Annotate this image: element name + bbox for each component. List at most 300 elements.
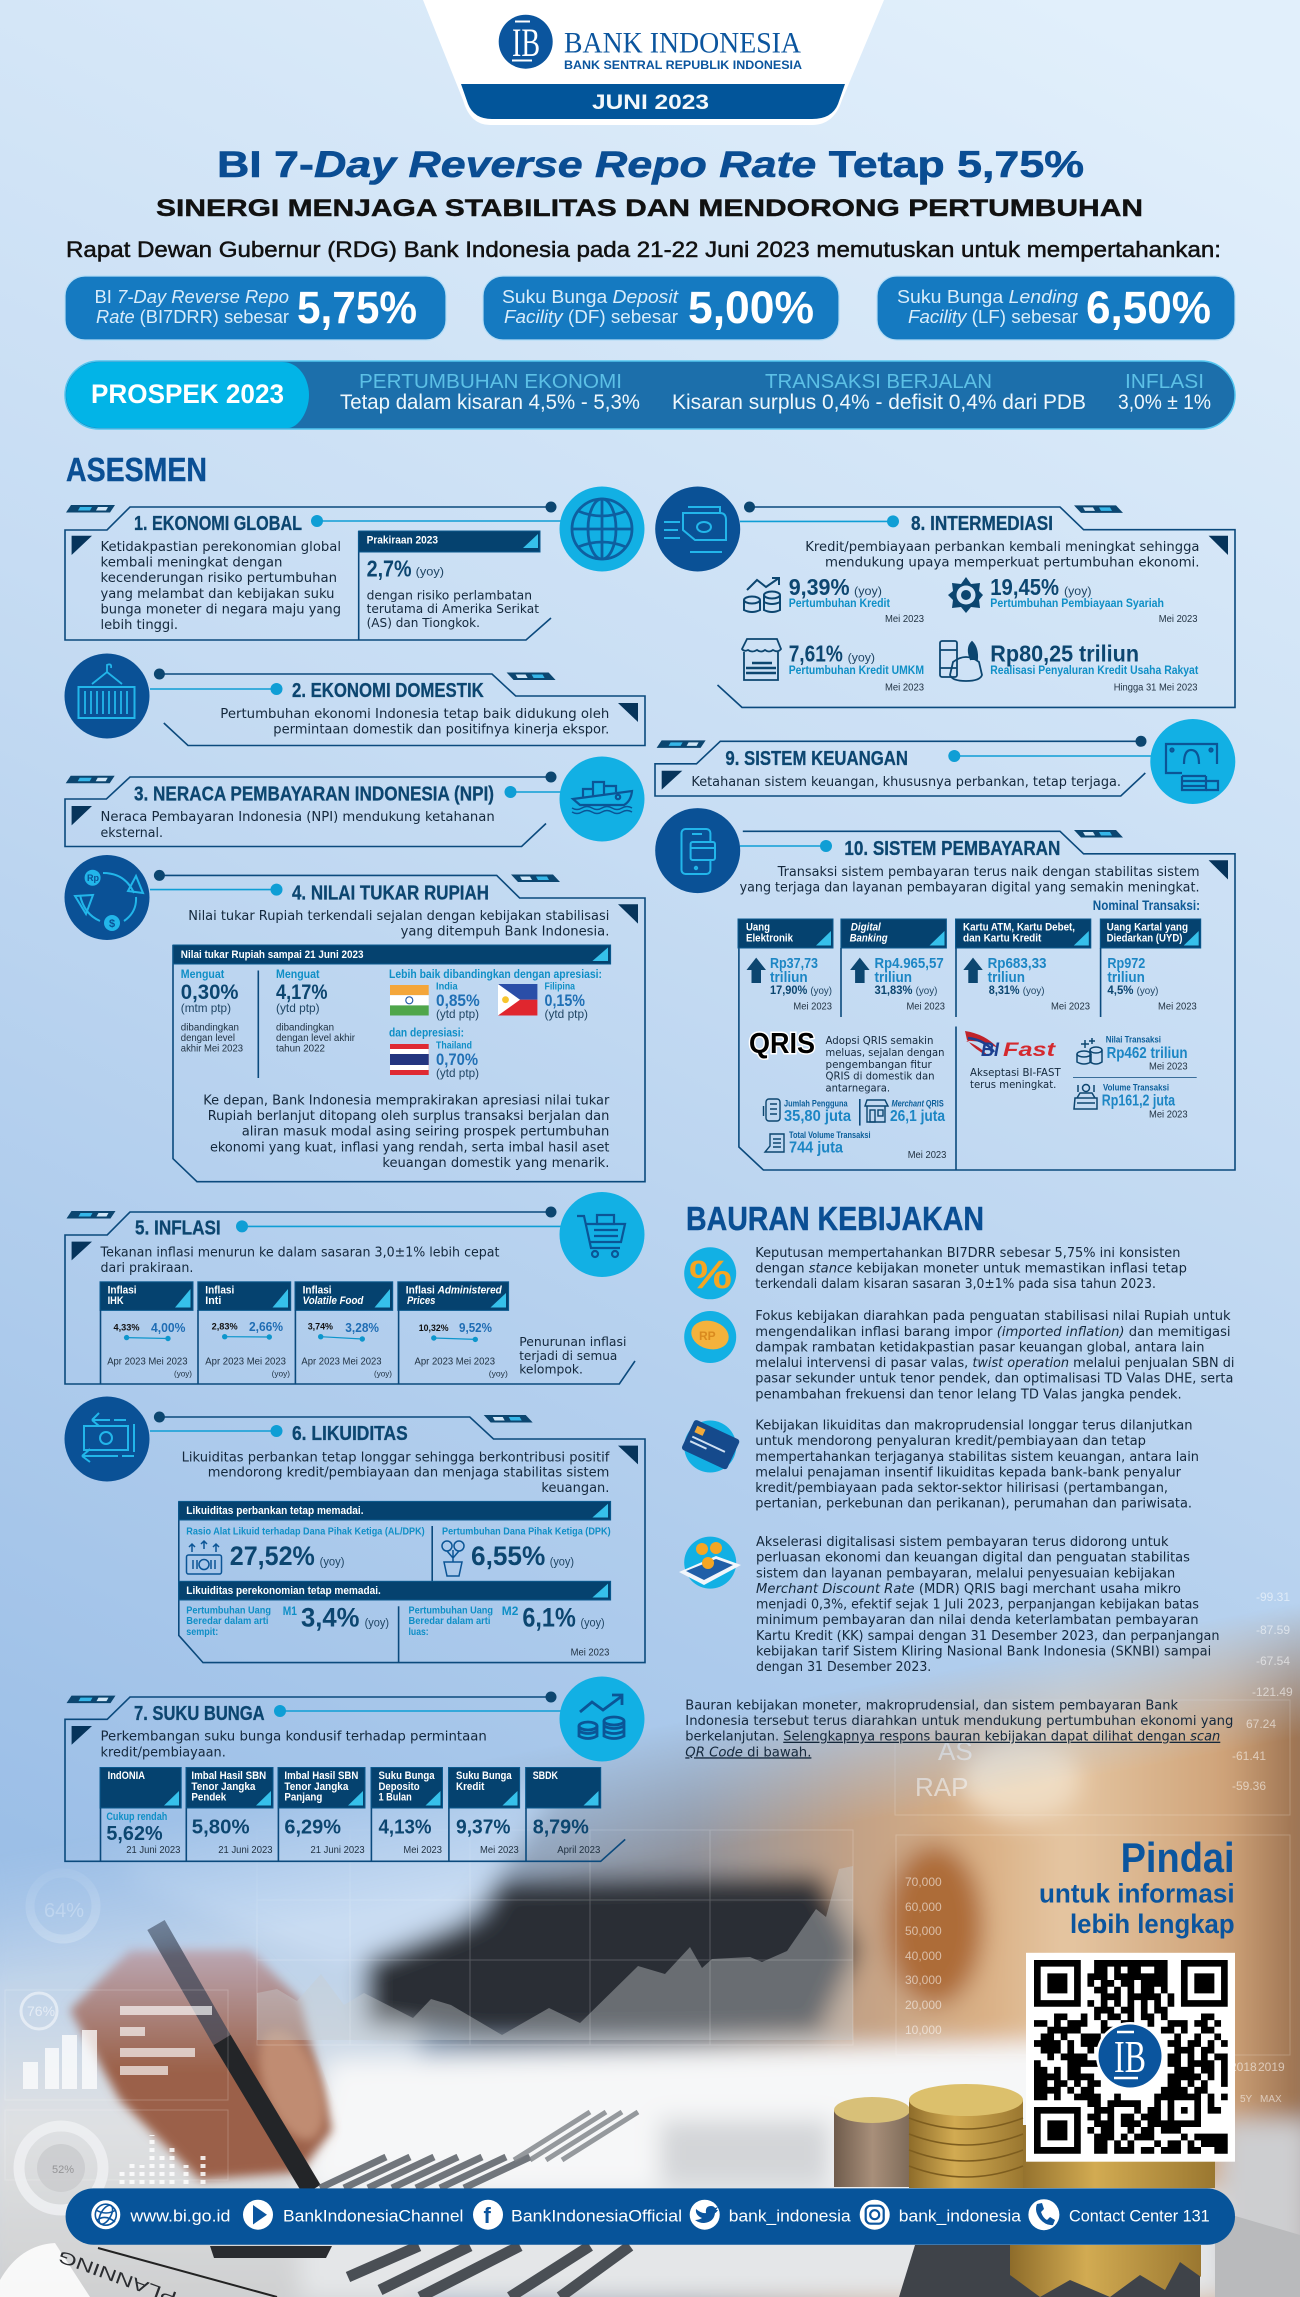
stat: M1: sempit: [186,1626,218,1638]
icon: currency cycle: Rp [87,873,99,883]
rate card: kredit: Kredit [456,1781,485,1793]
card: UYD: 4,5% [1107,983,1134,997]
QRIS text: pengembangan fitur [826,1059,932,1071]
main title: BI 7- Day Reverse Repo Rate Tetap 5,75% [217,144,1084,185]
closing text: QR Code di bawah. [685,1745,811,1760]
card: UYD: triliun [1107,969,1145,986]
stat: menguat ytd: dibandingkan [276,1023,334,1034]
background photo: hand, charts and coins: 60,000 [905,1900,942,1914]
stat: Thailand [436,1040,479,1080]
prospek 2023 bar: PERTUMBUHAN EKONOMI [359,371,622,393]
rate pill: lending facility: Suku Bunga Lending [897,287,1078,307]
subtitle: SINERGI MENJAGA STABILITAS DAN MENDORONG PERTUMBUHAN [156,195,1143,222]
section title: 5. INFLASI [135,1216,221,1240]
card: UYD: (yoy) [1137,986,1158,997]
stat: nilai transaksi: Nilai Transaksi [1106,1034,1161,1044]
stat: M1: 3,4% [301,1602,360,1632]
stat: M1: M1 [283,1604,297,1618]
rate card: SBN panjang: 6,29% [284,1817,341,1839]
policy text 3: pertanian, perkebunan dan perikanan), perumahan dan pariwisata. [755,1497,1192,1512]
stat: M2: (yoy) [580,1615,605,1629]
stat: pertumbuhan kredit: Mei 2023 [885,614,924,625]
inflation card: IHK: Inflasi [108,1284,137,1296]
stat: merchant QRIS: Merchant QRIS [892,1098,944,1108]
policy text 2: melalui intervensi di pasar valas, twist operation melalui penjualan SBN di [755,1356,1234,1371]
footer contact bar: Contact Center 131 [1069,2208,1210,2226]
stat: India [436,981,480,1021]
heading: bauran kebijakan: BAURAN KEBIJAKAN [686,1200,984,1237]
date note: Mei 2023 [571,1647,610,1658]
card: digital banking: (yoy) [916,986,937,997]
stat: kredit UMKM: Pertumbuhan Kredit UMKM [789,665,924,677]
body text: lebih tinggi. [100,618,178,633]
body text: kredit/pembiayaan. [100,1745,226,1760]
inflation card: inti: Inti [205,1295,221,1307]
card: digital banking: Mei 2023 [906,1002,945,1012]
inflation card: IHK: 4,33% [114,1322,140,1333]
icon: credit card [681,1419,740,1472]
policy text 2: pasar sekunder untuk tenor pendek, dan optimalisasi TD Valas DHE, serta [755,1372,1233,1387]
outlook text: ekonomi yang kuat, inflasi yang rendah, serta imbal hasil aset [210,1140,609,1155]
icon: twitter [690,2200,720,2230]
stat: M1: Beredar dalam arti [186,1615,269,1627]
body text: mendukung upaya memperkuat pertumbuhan ekonomi. [825,555,1200,570]
icon: growth coins [560,1676,644,1762]
panel: 4 nilai tukar rupiah [64,855,645,1182]
date band [461,84,845,119]
body text: mendorong kredit/pembiayaan dan menjaga stabilitas sistem [208,1465,609,1480]
body text [220,707,609,738]
card: uang elektronik: (yoy) [810,986,832,997]
icon: percent: % [689,1253,732,1297]
card: uang elektronik: 17,90% [770,983,808,997]
callout: prakiraan 2023 [359,531,540,630]
panel: 3 neraca pembayaran [65,756,644,846]
policy text 1 [755,1246,1187,1292]
stat: kredit usaha rakyat: Hingga 31 Mei 2023 [1114,682,1198,693]
panel: 9 sistem keuangan [655,719,1235,804]
background photo: hand, charts and coins: 70,000 [905,1875,942,1889]
stat: M2: luas: [408,1626,429,1638]
outlook text: Rupiah berlanjut ditopang oleh surplus transaksi berjalan dan [208,1109,609,1124]
faint photo ticker numbers: -61.41 [1232,1749,1266,1763]
rate card: IndONIA: IndONIA [108,1770,145,1782]
body text: Ketidakpastian perekonomian global [100,540,341,555]
inflation card: volatile food: (yoy) [374,1369,392,1378]
rate card: kredit [448,1768,520,1861]
body text: Perkembangan suku bunga kondusif terhadap permintaan [100,1730,487,1745]
body text: kembali meningkat dengan [100,556,282,571]
policy text 4: menjadi 0,3%, efektif sejak 1 Juli 2023, perpanjangan kebijakan batas [756,1598,1199,1613]
rate card: SBDK: SBDK [533,1770,558,1782]
stat: jumlah pengguna: Jumlah Pengguna [784,1098,848,1108]
stat: DPK growth: (yoy) [550,1555,574,1569]
stat: India: India [436,981,458,993]
body text: dari prakiraan. [100,1261,193,1276]
background photo: hand, charts and coins: 76% [27,2003,55,2019]
stat: DPK growth [442,1526,611,1576]
rate card: IndONIA [100,1768,181,1861]
policy text 2 [755,1309,1234,1402]
policy text 4: minimum pembayaran dan nilai denda keterlambatan pembayaran [756,1613,1198,1628]
inflation card: inti: Inflasi [205,1284,234,1296]
footer contact bar: bank_indonesia [729,2208,852,2226]
card: kartu ATM: triliun [988,969,1025,986]
stat: AL/DPK [186,1526,425,1574]
background photo: hand, charts and coins: 2018 [1230,2060,1257,2074]
background photo: hand, charts and coins: 50,000 [905,1924,942,1938]
card: kartu ATM: 8,31% [989,983,1020,997]
faint photo ticker numbers [1232,1590,1293,1793]
flag: Philippines [498,984,537,1016]
background photo: hand, charts and coins: 5Y [1240,2094,1253,2105]
outlook text: aliran masuk modal asing seiring prospek pertumbuhan [242,1125,609,1140]
body text [182,1450,610,1496]
heading: asesmen: ASESMEN [66,451,207,488]
rate card: deposito: Suku Bunga [378,1770,435,1782]
footer contact bar [66,2188,1235,2245]
policy text 3 [755,1419,1199,1512]
rate card: IndONIA: 21 Juni 2023 [126,1845,181,1856]
rate pill: BI7DRR: 5,75% [297,282,417,333]
stat: jumlah pengguna: 35,80 juta [784,1108,851,1125]
icon: currency cycle [64,855,150,940]
body text: bunga moneter di negara maju yang [100,602,341,617]
rate card: SBN pendek: Tenor Jangka [191,1781,256,1793]
prospek 2023 bar [65,361,1235,429]
decision intro: Rapat Dewan Gubernur (RDG) Bank Indonesia pada 21-22 Juni 2023 memutuskan untuk mempertahankan: [66,237,1221,262]
rate card: SBDK: April 2023 [557,1845,601,1856]
card: digital banking: Digital [851,922,882,934]
section title: 1. EKONOMI GLOBAL [134,512,302,535]
stat: pembiayaan syariah [948,574,1198,625]
inflation note: terjadi di semua [519,1348,617,1363]
stat: Thailand: (ytd ptp) [436,1066,479,1080]
stat: volume transaksi: Mei 2023 [1149,1109,1188,1120]
footer contact bar: BankIndonesiaChannel [283,2208,463,2226]
policy text 3: melalui penajaman insentif likuiditas kepada bank-bank penyalur [755,1465,1182,1480]
body text: keuangan. [541,1481,609,1496]
rate card: deposito: 4,13% [378,1817,432,1839]
background photo: hand, charts and coins: 64% [44,1900,84,1922]
icon: phone [1028,2199,1059,2230]
depreciation label: dan depresiasi: [389,1028,464,1040]
table header: nilai tukar [173,945,611,964]
table header: nilai tukar: Nilai tukar Rupiah sampai 21 Juni 2023 [181,949,364,961]
stat: M2: 6,1% [522,1602,576,1632]
rate pill: deposit facility: 5,00% [688,282,814,333]
card: UYD: Diedarkan (UYD) [1107,932,1183,944]
stat: M2: Pertumbuhan Uang [408,1604,493,1616]
rate card: SBN pendek: Imbal Hasil SBN [191,1770,266,1782]
card: kartu ATM: (yoy) [1023,986,1044,997]
rate card: SBDK: 8,79% [533,1817,589,1839]
stat: menguat mtm: dibandingkan [181,1023,239,1034]
stat: India: (ytd ptp) [436,1007,479,1021]
stat: pembiayaan syariah: Mei 2023 [1159,614,1198,625]
inflation note: kelompok. [519,1362,583,1377]
inflation card: IHK: 4,00% [151,1321,186,1335]
stat: pertumbuhan kredit [744,574,924,625]
stat: AL/DPK: 27,52% [230,1541,315,1571]
rate card: IndONIA: 5,62% [106,1823,163,1845]
call to action: pindai [1039,1834,1235,1939]
inflation card: administered prices: 9,52% [459,1321,492,1335]
background photo: hand, charts and coins: 40,000 [905,1949,942,1963]
section title: 3. NERACA PEMBAYARAN INDONESIA (NPI) [134,782,494,806]
policy text 4: sistem dan layanan pembayaran, melalui penyesuaian kebijakan [756,1566,1175,1581]
body text: Kredit/pembiayaan perbankan kembali meningkat sehingga [805,540,1200,555]
card: uang elektronik: Mei 2023 [793,1002,832,1012]
policy text 3: untuk mendorong penyaluran kredit/pembiayaan dan tetap [755,1434,1146,1449]
flag: India [390,985,429,1016]
stat: kredit usaha rakyat: Rp80,25 triliun [990,640,1139,666]
stat: menguat mtm [181,969,243,1055]
section title: 10. SISTEM PEMBAYARAN [844,837,1060,860]
rate pill: BI7DRR [65,276,446,340]
policy text 3: Kebijakan likuiditas dan makroprudensial longgar terus dilanjutkan [755,1419,1193,1434]
body text: Neraca Pembayaran Indonesia (NPI) mendukung ketahanan [100,810,495,825]
stat: Filipina: (ytd ptp) [544,1007,588,1021]
background photo: hand, charts and coins: 10,000 [905,2023,942,2037]
policy text 3: mempertahankan terjaganya stabilitas sistem keuangan, antara lain [755,1450,1199,1465]
rate card: SBN pendek: 21 Juni 2023 [218,1845,273,1856]
date text: JUNI 2023 [592,91,709,114]
faint photo ticker numbers: 67.24 [1246,1717,1276,1731]
stat: Thailand: Thailand [436,1040,472,1052]
card: UYD: Rp972 [1107,955,1145,972]
stat: M1: Pertumbuhan Uang [186,1604,271,1616]
rate card: SBN panjang: Imbal Hasil SBN [284,1770,358,1782]
policy text 4 [756,1535,1220,1675]
panel: 5 inflasi [65,1192,644,1384]
policy text 1: Keputusan mempertahankan BI7DRR sebesar 5,75% ini konsisten [755,1246,1180,1261]
body text [188,909,609,940]
icon: currency cycle: $ [109,918,115,930]
card: uang elektronik: Uang [746,922,770,934]
stat: menguat mtm: akhir Mei 2023 [181,1044,243,1055]
panel: 2 ekonomi domestik [64,654,645,746]
stat: Filipina: Filipina [544,981,575,993]
stat: pertumbuhan kredit: (yoy) [854,584,882,598]
stat: India: 0,85% [436,992,480,1010]
stat: menguat ytd: dengan level akhir [276,1033,356,1044]
date note: Mei 2023 [908,1150,947,1161]
stat: menguat mtm: Menguat [181,969,224,981]
card: uang elektronik: triliun [770,969,808,986]
stat: pembiayaan syariah: 19,45% [990,574,1059,600]
QR code: IB [1114,2031,1146,2082]
stat: menguat ytd: Menguat [276,969,320,981]
inflation card: inti: 2,83% [212,1322,238,1332]
inflation card: IHK [100,1282,193,1384]
section title: 9. SISTEM KEUANGAN [725,747,908,770]
rate card: SBN panjang: 21 Juni 2023 [310,1845,365,1856]
rate pill: BI7DRR: Rate (BI7DRR) sebesar [96,307,289,327]
card: UYD: Uang Kartal yang [1107,922,1188,934]
card: digital banking: Banking [850,932,888,944]
icon: money arrows [64,1396,150,1482]
panel: 1 ekonomi global [65,486,644,640]
QR code [1026,1953,1235,2162]
background photo: hand, charts and coins: 20,000 [905,1998,942,2012]
icon: instagram [860,2200,890,2230]
inflation card: administered prices: Apr 2023 Mei 2023 [414,1356,495,1367]
logo: QRIS: QRIS [749,1028,815,1060]
stat: AL/DPK: Rasio Alat Likuid terhadap Dana Pihak Ketiga (AL/DPK) [186,1526,425,1538]
BI-Fast text: Akseptasi BI-FAST [970,1067,1061,1079]
rate card: IndONIA: Cukup rendah [106,1811,168,1823]
body text [805,540,1200,570]
BI-Fast text [970,1067,1061,1091]
body text: Tekanan inflasi menurun ke dalam sasaran 3,0±1% lebih cepat [100,1245,500,1260]
prospek 2023 bar: TRANSAKSI BERJALAN [765,371,992,393]
outlook text: keuangan domestik yang menarik. [382,1156,609,1171]
section title: 4. NILAI TUKAR RUPIAH [292,881,489,904]
stat: menguat ytd: 4,17% [276,981,328,1004]
panel: 8 intermediasi [655,486,1235,707]
body text: yang ditempuh Bank Indonesia. [401,925,609,940]
stat: Thailand: 0,70% [436,1051,478,1069]
card: UYD: Mei 2023 [1158,1002,1197,1012]
callout: prakiraan 2023: dengan risiko perlambatan [367,588,532,602]
prospek 2023 bar: PROSPEK 2023 [91,379,284,409]
flag: Thailand [390,1044,429,1075]
inflation card: IHK: (yoy) [174,1369,192,1378]
panel: 7 suku bunga [65,1676,644,1861]
icon: money scroll [655,486,740,572]
policy text 2: mengendalikan inflasi barang impor (imported inflation) dan memitigasi [755,1325,1231,1340]
card: uang elektronik [738,919,833,1012]
table header: likuiditas perekonomian [179,1581,611,1600]
card: uang elektronik: Rp37,73 [770,955,818,972]
section title: 2. EKONOMI DOMESTIK [292,679,484,702]
card: kartu ATM: Mei 2023 [1051,1002,1090,1012]
icon: website globe [91,2200,120,2229]
card: kartu ATM: Rp683,33 [988,955,1046,972]
stat: kredit UMKM: (yoy) [848,650,875,664]
stat: merchant QRIS: 26,1 juta [890,1108,945,1125]
rate card: SBN pendek: 5,80% [192,1817,250,1839]
icon: rupiah coin: RP [699,1329,716,1343]
body text [100,540,341,633]
prospek 2023 bar: Kisaran surplus 0,4% - defisit 0,4% dari PDB [672,391,1086,414]
card: kartu ATM [956,919,1091,1017]
outlook text [203,1094,610,1171]
QRIS text: Adopsi QRIS semakin [826,1035,933,1047]
stat: DPK growth: 6,55% [471,1541,545,1571]
inflation card: administered prices: Inflasi Administered [406,1284,502,1296]
stat: M2: M2 [502,1604,519,1618]
card: UYD [1100,919,1201,1017]
inflation card: volatile food [295,1282,393,1384]
stat: Filipina: 0,15% [544,992,585,1010]
rate pill: BI7DRR: BI 7-Day Reverse Repo [94,287,289,307]
icon: ship [560,756,644,842]
body text: Nilai tukar Rupiah terkendali sejalan dengan kebijakan stabilisasi [188,909,609,924]
inflation card: volatile food: 3,74% [308,1322,334,1332]
stat: menguat mtm: (mtm ptp) [181,1001,231,1015]
stat: menguat ytd [276,969,356,1055]
stat: menguat mtm: 0,30% [181,981,239,1004]
rate card: SBN pendek [186,1768,273,1861]
outlook text: Ke depan, Bank Indonesia memprakirakan apresiasi nilai tukar [203,1094,610,1108]
body text: Pertumbuhan ekonomi Indonesia tetap baik didukung oleh [220,707,609,722]
label: nominal transaksi: Nominal Transaksi: [1093,898,1200,913]
inflation card: IHK: Apr 2023 Mei 2023 [107,1356,188,1367]
stat: M2 [408,1602,605,1638]
closing text [685,1698,1233,1760]
icon: container [64,654,150,738]
icon: facebook: f [484,2203,492,2228]
rate card: SBN panjang: Panjang [284,1792,322,1804]
inflation card: volatile food: Inflasi [303,1284,332,1296]
card: digital banking: 31,83% [874,983,913,997]
rate card: kredit: 9,37% [456,1817,511,1839]
inflation card: inti: (yoy) [272,1369,290,1378]
icon: facebook [473,2200,503,2230]
stat: M1 [186,1602,389,1638]
callout: prakiraan 2023: (yoy) [416,565,444,579]
stat: total volume: Total Volume Transaksi [789,1130,870,1140]
icon: phone with coins [679,1537,741,1589]
QRIS text: meluas, sejalan dengan [826,1047,944,1059]
stat: total volume [765,1130,870,1157]
closing text: Indonesia tersebut terus diarahkan untuk mendukung pertumbuhan ekonomi yang [685,1714,1233,1729]
comparison label: Lebih baik dibandingkan dengan apresiasi: [389,969,602,981]
card: digital banking: Rp4.965,57 [874,955,944,972]
faint photo ticker numbers: -67.54 [1256,1654,1290,1668]
stat: nilai transaksi [1077,1034,1188,1073]
stat: jumlah pengguna [764,1098,851,1125]
QRIS text [826,1035,944,1095]
stat: menguat ytd: tahun 2022 [276,1044,325,1055]
card: digital banking: triliun [874,969,912,986]
panel: 10 sistem pembayaran [655,808,1235,1170]
icon: percent [684,1247,736,1299]
card: uang elektronik: Elektronik [746,932,794,944]
policy text 4: Merchant Discount Rate (MDR) QRIS bagi merchant usaha mikro [756,1582,1181,1597]
stat: pertumbuhan kredit: 9,39% [789,574,850,600]
faint photo ticker numbers: -99.31 [1256,1590,1290,1604]
policy text 4: perluasan ekonomi dan keuangan digital dan penguatan stabilitas [756,1551,1190,1566]
QRIS text: QRIS di domestik dan [826,1071,935,1083]
policy text 1: dengan stance kebijakan moneter untuk memastikan inflasi tetap [755,1261,1187,1276]
rate card: SBN panjang [278,1768,365,1861]
BI-Fast text: terus meningkat. [970,1079,1056,1091]
rate card: kredit: Suku Bunga [456,1770,512,1782]
stat: M1: (yoy) [365,1615,389,1629]
inflation card: administered prices: Prices [407,1295,435,1307]
inflation card: volatile food: Volatile Food [303,1295,364,1307]
faint photo ticker numbers: -59.36 [1232,1779,1266,1793]
card: kartu ATM: dan Kartu Kredit [963,932,1042,944]
policy text 4: kebijakan tarif Sistem Kliring Nasional Bank Indonesia (SKNBI) sampai [756,1644,1211,1659]
stat: nilai transaksi: Mei 2023 [1149,1062,1188,1073]
body text [100,1245,500,1276]
body text: Likuiditas perbankan tetap longgar sehingga berkontribusi positif [182,1450,610,1465]
inflation card: administered prices: 10,32% [419,1323,449,1334]
faint photo ticker numbers: -121.49 [1252,1685,1293,1699]
policy text 4: Akselerasi digitalisasi sistem pembayaran terus didorong untuk [756,1535,1169,1550]
rate card: deposito: Mei 2023 [403,1845,442,1856]
rate card: deposito: 1 Bulan [378,1792,412,1804]
rate card: deposito [371,1768,442,1861]
stat: volume transaksi [1074,1083,1188,1120]
rate pill: deposit facility: Facility (DF) sebesar [504,307,678,327]
stat: nilai transaksi: Rp462 triliun [1107,1045,1188,1062]
stat: volume transaksi: Rp161,2 juta [1102,1092,1175,1109]
